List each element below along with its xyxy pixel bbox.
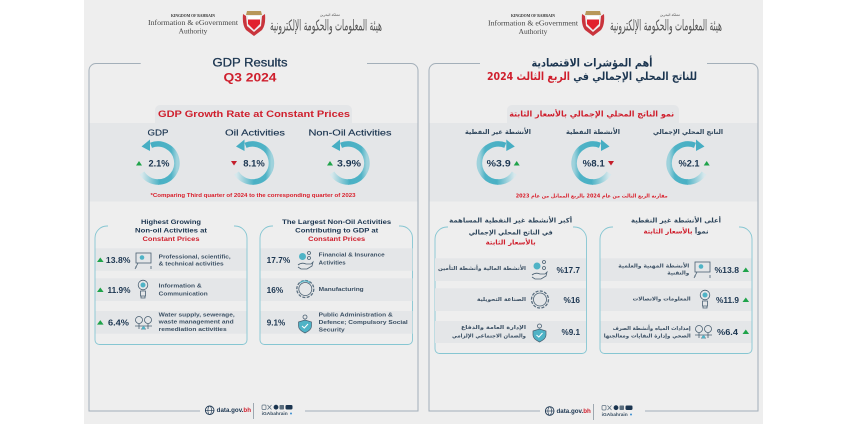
metric: oil activities: الأنشطة النفطية [566, 127, 620, 136]
row: public administration: 9.1% [267, 318, 286, 327]
footer: data.gov.bh [217, 408, 251, 414]
row: financial [438, 260, 580, 279]
title [212, 56, 288, 84]
header logo: KINGDOM OF BAHRAIN [511, 14, 555, 18]
metric: GDP: الناتج المحلي الإجمالي [653, 128, 723, 136]
row: water [97, 312, 235, 333]
icon: gear with hand [138, 280, 148, 298]
social icons [602, 405, 632, 410]
row: manufacturing: الصناعة التحويلية [477, 297, 526, 303]
social icons [262, 405, 292, 410]
row: information [97, 280, 208, 298]
row: manufacturing: Manufacturing [319, 287, 364, 293]
metric: non-oil activities: Non-Oil Activities [308, 128, 392, 138]
metric: GDP: 2.1% [148, 158, 170, 170]
row: water: %6.4 [717, 328, 738, 337]
comparison note: مقارنة الربع الثالث من عام 2024 بالربع المماثل من عام 2023 [516, 193, 668, 199]
title: أهم المؤشرات الاقتصادية [532, 56, 652, 70]
heading: Contributing to GDP at [295, 227, 379, 234]
icon: gear [297, 280, 314, 298]
panel: GDP growth rate [430, 105, 758, 202]
heading [282, 219, 392, 243]
row: water: waste management and [158, 320, 234, 326]
icon: water [695, 326, 712, 338]
comparison note: *Comparing Third quarter of 2024 to the corresponding quarter of 2023 [150, 193, 356, 199]
icon: shield [298, 315, 312, 333]
header logo: KINGDOM OF BAHRAIN [171, 14, 215, 18]
row: water: إمدادات المياه وأنشطة الصرف [613, 324, 691, 332]
header logo: Information & eGovernment [148, 18, 239, 27]
title [487, 56, 697, 83]
title: Q3 2024 [224, 70, 277, 84]
icon: presentation [135, 253, 151, 269]
row: information: 11.9% [108, 286, 131, 295]
metric: GDP: GDP [148, 128, 169, 138]
metric: non-oil activities: الأنشطة غير النفطية [465, 127, 531, 136]
row: professional: 13.8% [106, 256, 131, 265]
header logo [488, 11, 722, 36]
icon: shield [533, 324, 546, 342]
icon: coins in hand [298, 252, 313, 269]
metric: oil activities: Oil Activities [225, 128, 285, 138]
heading [135, 219, 208, 243]
title: GDP Results [212, 56, 288, 70]
panel: highest growing activities [95, 219, 247, 344]
row: public administration [452, 324, 580, 342]
row: financial [267, 252, 385, 269]
row: professional [618, 261, 749, 278]
heading: Constant Prices [308, 236, 366, 243]
metric: non-oil activities [308, 128, 392, 182]
title: للناتج المحلي الإجمالي في الربع الثالث 2024 [487, 70, 697, 83]
row: manufacturing [267, 280, 364, 298]
header logo [148, 11, 382, 36]
panel: English infographic [89, 11, 418, 419]
header logo: مملكة البحرين [660, 13, 680, 17]
heading [449, 216, 572, 246]
row: water: remediation activities [159, 327, 227, 333]
row: professional: الأنشطة المهنية والعلمية [618, 261, 689, 269]
metric: GDP [653, 128, 723, 182]
header logo: Authority [519, 27, 548, 36]
metric: non-oil activities: 3.9% [337, 158, 362, 170]
row: manufacturing: %16 [564, 296, 580, 305]
heading: نمواً بالأسعار الثابتة [644, 226, 708, 236]
row: public administration: Public Administration & [319, 312, 393, 318]
heading: بالأسعار الثابتة [486, 237, 536, 246]
heading: في الناتج المحلي الإجمالي [469, 228, 553, 236]
icon: presentation [694, 262, 710, 278]
heading: Non-oil Activities at [135, 227, 208, 234]
row: public administration: Security [319, 328, 346, 334]
row: water: Water supply, sewerage, [159, 312, 235, 318]
footer: iGAbahrain [262, 411, 288, 416]
panel: GDP growth rate [90, 105, 418, 202]
row: water: 6.4% [108, 318, 130, 327]
row: financial: Financial & Insurance [319, 253, 385, 259]
row: water: الصحي وإدارة النفايات ومعالجتها [604, 333, 691, 339]
metric: GDP [136, 128, 177, 182]
panel: highest growing activities (Arabic) [600, 216, 752, 354]
row: professional: والتقنية [667, 271, 689, 277]
heading: The Largest Non-Oil Activities [282, 219, 392, 226]
icon: globe [205, 406, 214, 415]
footer [545, 404, 632, 420]
icon: gear with hand [700, 290, 710, 308]
header logo: Information & eGovernment [488, 18, 579, 28]
icon: globe [545, 407, 554, 415]
row: financial: 17.7% [267, 256, 291, 265]
metric: non-oil activities: %3.9 [487, 158, 511, 170]
row: professional: %13.8 [714, 266, 739, 275]
row: manufacturing [477, 291, 580, 308]
panel: Arabic infographic [429, 11, 758, 420]
footer: data.gov.bh [556, 409, 591, 415]
row: financial: Activities [319, 260, 346, 266]
icon: gear [532, 291, 548, 308]
row: information [633, 290, 749, 308]
header logo: هيئة المعلومات والحكومة الإلكترونية [610, 16, 722, 34]
row: information: %11.9 [716, 296, 739, 305]
row: water [604, 324, 749, 339]
metric: oil activities: 8.1% [243, 158, 265, 170]
footer: iGAbahrain [602, 412, 628, 417]
row: public administration: الإدارة العامة والدفاع [461, 325, 526, 331]
outer frame [89, 64, 418, 411]
row: public administration: Defence; Compulsory Social [319, 320, 408, 326]
metric: oil activities [225, 128, 285, 182]
heading: أكبر الأنشطة غير النفطية المساهمة [449, 216, 572, 225]
footer [205, 403, 292, 419]
row: information: المعلومات والاتصالات [633, 296, 691, 302]
panel: largest non-oil activities [260, 219, 412, 344]
metric: oil activities [566, 127, 620, 182]
row: information: Information & [159, 284, 202, 290]
row: public administration: %9.1 [562, 328, 580, 337]
header logo: مملكة البحرين [320, 13, 340, 17]
row: financial: %17.7 [556, 266, 580, 275]
heading: أعلى الأنشطة غير النفطية [631, 216, 721, 225]
icon: coins in hand [532, 260, 547, 279]
row: professional: & technical activities [159, 262, 224, 268]
metric: GDP: %2.1 [678, 158, 700, 170]
row: professional [97, 253, 231, 269]
panel: largest non-oil activities (Arabic) [435, 216, 586, 354]
heading: growth rate: نمو الناتج المحلي الإجمالي بالأسعار الثابتة [509, 109, 674, 119]
row: public administration [267, 312, 408, 334]
row: information: Communication [159, 291, 208, 297]
heading: Highest Growing [141, 219, 201, 226]
heading: growth rate: GDP Growth Rate at Constant Prices [158, 109, 350, 119]
row: professional: Professional, scientific, [159, 254, 231, 260]
row: financial: الأنشطة المالية وأنشطة التأمين [438, 264, 526, 272]
metric: non-oil activities [465, 127, 531, 182]
metric: oil activities: %8.1 [583, 158, 605, 170]
row: manufacturing: 16% [267, 286, 284, 295]
header logo: Authority [179, 26, 208, 36]
icon: water [135, 316, 152, 330]
heading: Constant Prices [142, 236, 200, 243]
outer frame [429, 64, 758, 411]
row: public administration: والضمان الاجتماعي الإلزامي [452, 333, 526, 339]
header logo: هيئة المعلومات والحكومة الإلكترونية [270, 16, 382, 34]
heading [631, 216, 721, 236]
